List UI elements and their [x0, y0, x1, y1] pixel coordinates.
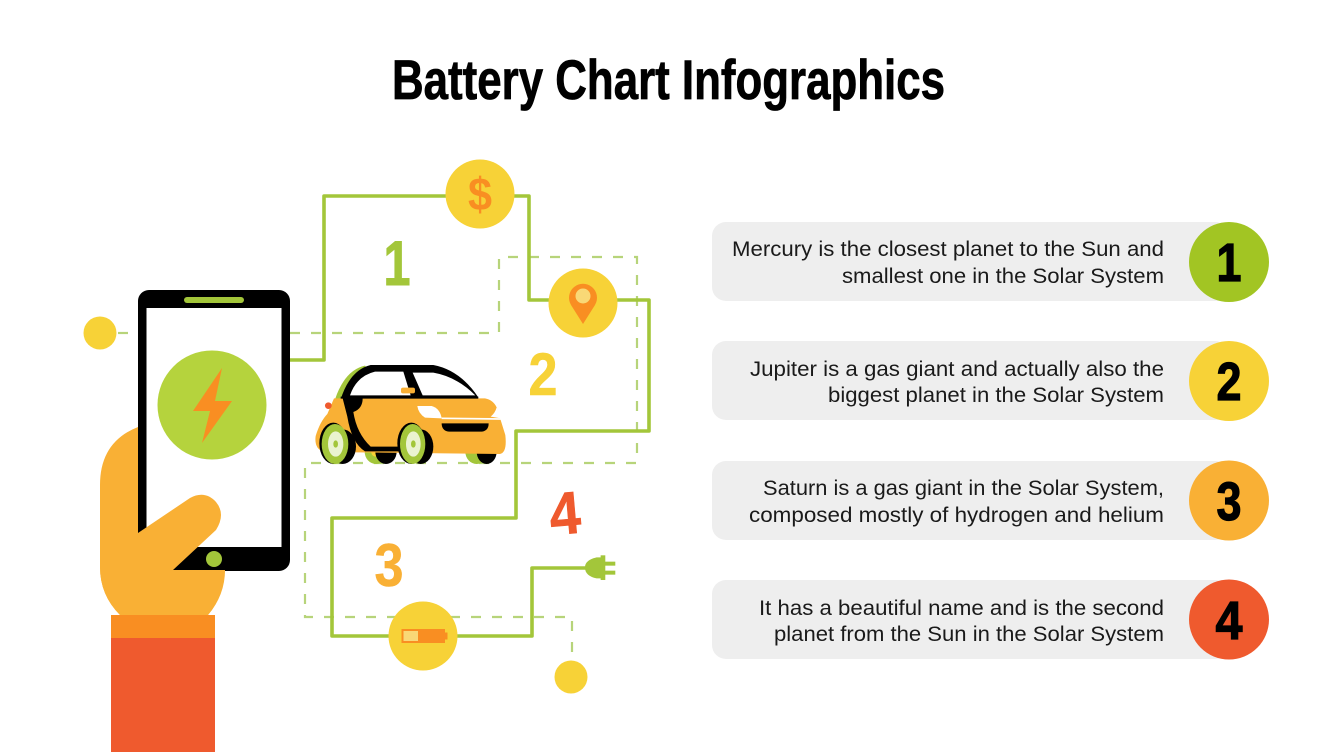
- palm: [100, 427, 225, 615]
- icon: location pin: [548, 268, 618, 338]
- panel: item 1: [712, 222, 1269, 302]
- dashed connector network: [118, 257, 637, 655]
- left yellow dot: [84, 316, 116, 350]
- panel: item 1: Mercury is the closest planet to the Sun and: [732, 237, 1164, 261]
- solid circuit line: [290, 196, 649, 636]
- panel: item 2: Jupiter is a gas giant and actually also the: [750, 357, 1164, 381]
- panel: item 4: planet from the Sun in the Solar System: [774, 622, 1164, 646]
- panel: item 3: Saturn is a gas giant in the Solar System,: [763, 476, 1164, 500]
- panel: item 3: composed mostly of hydrogen and helium: [749, 503, 1164, 527]
- panel: item 1: smallest one in the Solar System: [842, 264, 1164, 288]
- panel: item 4: [712, 580, 1269, 660]
- illustration: car: [315, 365, 506, 464]
- phone home button: [206, 551, 222, 567]
- icon: battery: [388, 602, 458, 670]
- cuff: [111, 615, 215, 638]
- icon: dollar: [446, 160, 514, 228]
- panel: item 3: [712, 460, 1269, 540]
- panel: item 2: biggest planet in the Solar System: [828, 383, 1164, 407]
- thumb and lower hand: [100, 495, 225, 615]
- icon: dollar: $: [468, 168, 492, 220]
- panel: item 2: [712, 341, 1269, 421]
- title: Battery Chart Infographics: [392, 48, 945, 111]
- panel: item 3: 3: [1216, 472, 1242, 532]
- illustration: hand holding phone: [100, 290, 290, 752]
- number 3: 3: [374, 532, 404, 599]
- charging circle: [158, 350, 266, 460]
- number 4: 4: [547, 479, 584, 548]
- lightning bolt: [193, 368, 232, 443]
- phone screen: [146, 308, 282, 547]
- panel: item 1: 1: [1216, 233, 1242, 293]
- number 2: 2: [528, 341, 558, 408]
- bottom yellow dot: [554, 660, 588, 694]
- number 1: 1: [384, 229, 410, 299]
- panel: item 2: 2: [1216, 352, 1242, 412]
- phone body: [138, 290, 290, 571]
- phone speaker: [184, 297, 244, 303]
- sleeve: [111, 638, 215, 752]
- panel: item 4: 4: [1216, 591, 1242, 651]
- icon: plug: [585, 555, 615, 580]
- panel: item 4: It has a beautiful name and is the second: [759, 596, 1164, 620]
